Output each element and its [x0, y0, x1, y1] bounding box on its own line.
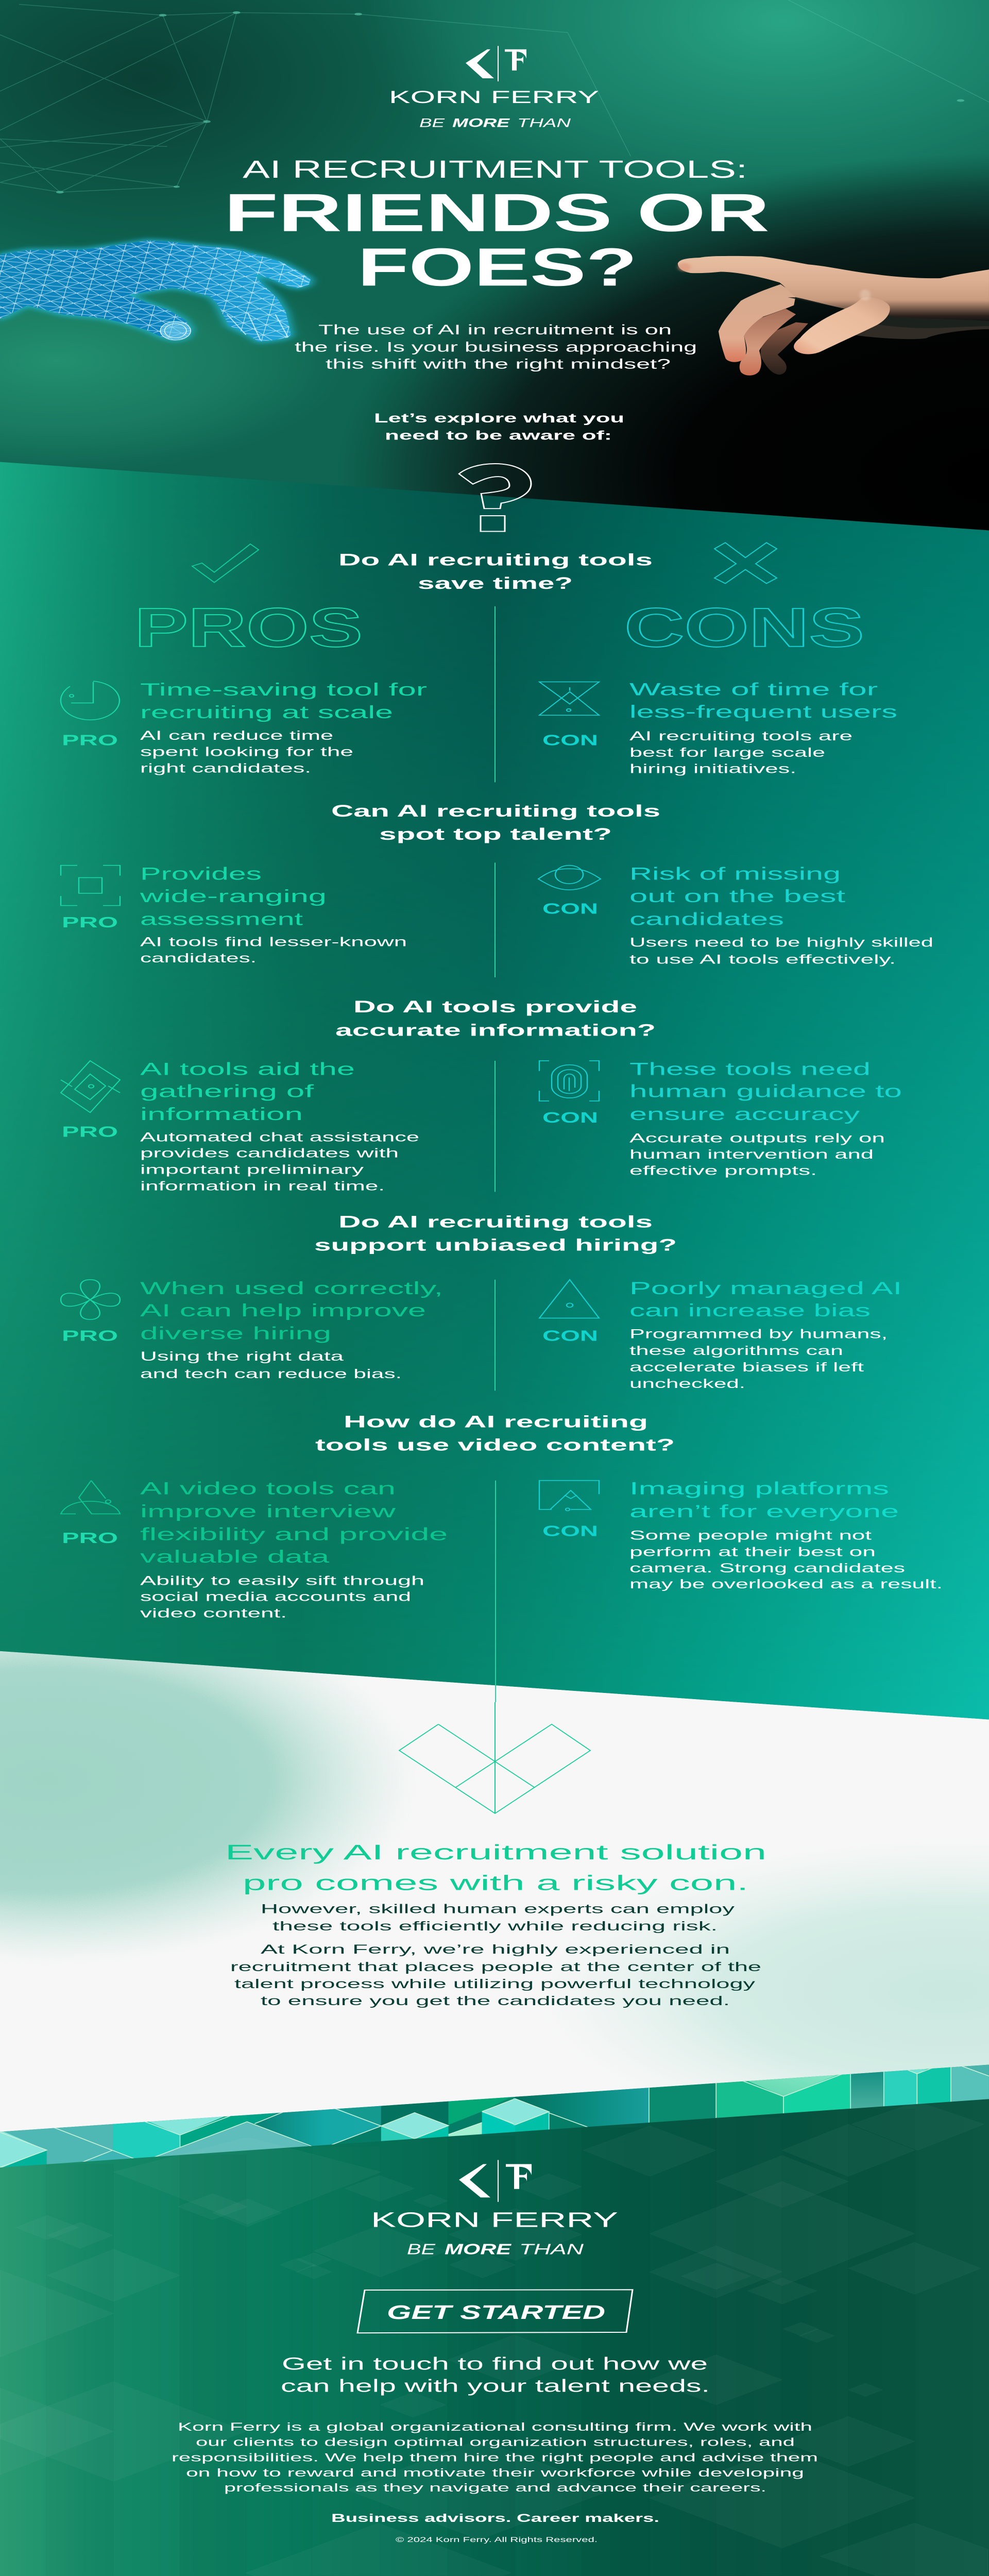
- pro text: [140, 935, 407, 965]
- heading: cons: CONS: [624, 597, 864, 658]
- closing text: recruitment that places people at the center of the: [230, 1959, 761, 1974]
- pro heading: wide-ranging: [140, 887, 327, 906]
- con text: Some people might not: [629, 1528, 872, 1543]
- label: con: CON: [542, 1522, 598, 1539]
- heading: save time: [338, 550, 653, 592]
- panel: pro assessment: [61, 864, 407, 965]
- network lines: [0, 0, 989, 193]
- con text: effective prompts.: [629, 1163, 817, 1178]
- heading: unbiased hiring: support unbiased hiring?: [314, 1235, 677, 1255]
- heading: accurate information: Do AI tools provide: [353, 997, 637, 1016]
- title: FRIENDS OR: [224, 183, 770, 243]
- closing text: However, skilled human experts can employ: [261, 1902, 735, 1916]
- icon: eye: [538, 866, 601, 890]
- heading: pros: PROS: [134, 597, 363, 658]
- icon: clock: [61, 681, 120, 720]
- con text: [629, 935, 933, 967]
- closing text: these tools efficiently while reducing risk.: [272, 1919, 718, 1934]
- icon: interlocked diamonds: [61, 1061, 120, 1112]
- icon: geometric arc: [61, 1481, 120, 1514]
- con text: [629, 1131, 885, 1178]
- pro text: provides candidates with: [140, 1146, 399, 1160]
- pro heading: flexibility and provide: [140, 1524, 448, 1544]
- closing heading: [225, 1840, 766, 1895]
- label: con: CON: [542, 900, 598, 917]
- heading: video content: tools use video content?: [315, 1435, 675, 1454]
- palm shadow: [788, 297, 989, 339]
- panel: footer background: [0, 2099, 989, 2576]
- con heading: ensure accuracy: [629, 1105, 860, 1124]
- closing text: to ensure you get the candidates you need.: [261, 1993, 730, 2008]
- company description: professionals as they navigate and advance their careers.: [224, 2482, 766, 2494]
- panel: geometric band: [0, 2060, 989, 2172]
- slogan: Business advisors. Career makers.: [331, 2512, 659, 2524]
- pro text: [140, 728, 353, 775]
- pro text: and tech can reduce bias.: [140, 1366, 402, 1381]
- con text: to use AI tools effectively.: [629, 952, 896, 967]
- panel: pro gathering information: [61, 1059, 419, 1193]
- con heading: less-frequent users: [629, 702, 897, 722]
- back of hand and index finger: [678, 256, 989, 321]
- pro text: Using the right data: [140, 1349, 344, 1364]
- pro text: information in real time.: [140, 1179, 385, 1193]
- con text: may be overlooked as a result.: [629, 1577, 943, 1591]
- icon: cross mark: [714, 543, 777, 584]
- pro heading: AI video tools can: [140, 1479, 396, 1499]
- con heading: out on the best: [629, 887, 845, 906]
- heading: spot top talent: Can AI recruiting tools: [331, 802, 660, 820]
- intro text: the rise. Is your business approaching: [295, 340, 697, 355]
- pro text: social media accounts and: [140, 1589, 411, 1604]
- tagline: BE: [419, 116, 445, 130]
- pro text: Ability to easily sift through: [140, 1573, 424, 1588]
- pro heading: information: [140, 1105, 303, 1124]
- panel: con increased bias: [539, 1279, 902, 1391]
- pro heading: assessment: [140, 909, 303, 929]
- con text: unchecked.: [629, 1376, 745, 1391]
- con text: human intervention and: [629, 1147, 874, 1162]
- icon: clover: [61, 1280, 120, 1319]
- label: con: CON: [542, 1109, 598, 1126]
- panel: teal pros and cons background: [0, 462, 989, 1720]
- label: con: CON: [542, 1327, 598, 1344]
- tagline: THAN: [517, 116, 571, 130]
- company description: Korn Ferry is a global organizational consulting firm. We work with: [178, 2420, 812, 2433]
- label: pro: PRO: [62, 1327, 118, 1344]
- tagline: [419, 116, 571, 130]
- panel: con human guidance: [539, 1059, 902, 1178]
- pro heading: AI can help improve: [140, 1301, 426, 1320]
- con text: best for large scale: [629, 745, 825, 759]
- label: pro: PRO: [62, 732, 118, 749]
- label: con: CON: [542, 732, 598, 749]
- panel: con imaging platforms: [539, 1479, 943, 1591]
- pro text: important preliminary: [140, 1162, 364, 1177]
- pro heading: [140, 680, 427, 722]
- icon: digital wireframe hand: [0, 241, 311, 342]
- con heading: These tools need: [629, 1059, 871, 1079]
- con heading: [629, 680, 897, 722]
- call to action text: can help with your talent needs.: [281, 2376, 710, 2396]
- con heading: human guidance to: [629, 1081, 902, 1101]
- thumb: [794, 297, 890, 354]
- wordmark: KORN FERRY: [389, 88, 599, 107]
- icon: hourglass: [539, 682, 599, 715]
- tagline: BE: [407, 2241, 436, 2258]
- title: AI RECRUITMENT TOOLS:: [243, 156, 747, 183]
- pro heading: improve interview: [140, 1502, 396, 1521]
- title: [224, 156, 770, 297]
- logo: [389, 46, 599, 130]
- tagline: THAN: [519, 2241, 584, 2258]
- closing heading: Every AI recruitment solution: [225, 1840, 766, 1864]
- panel: pro diverse hiring: [61, 1279, 443, 1381]
- title: FOES?: [357, 238, 637, 297]
- heading: save time: Do AI recruiting tools: [338, 550, 653, 569]
- pro heading: Time-saving tool for: [140, 680, 427, 700]
- call to action text: [281, 2354, 710, 2396]
- con text: Users need to be highly skilled: [629, 935, 933, 950]
- icon: focus brackets: [61, 866, 120, 906]
- button: get started: [357, 2290, 633, 2333]
- closing text: [230, 1902, 761, 2008]
- intro text: [295, 322, 697, 372]
- panel: white closing background: [0, 1597, 989, 2145]
- tagline: MORE: [445, 2241, 512, 2258]
- con heading: Waste of time for: [629, 680, 878, 699]
- panel: con missing candidates: [538, 864, 933, 967]
- button: get started: GET STARTED: [387, 2302, 605, 2324]
- panel: pro time-saving: [61, 680, 427, 775]
- pro heading: Provides: [140, 864, 262, 884]
- footer logo: [371, 2160, 618, 2258]
- con text: AI recruiting tools are: [629, 729, 852, 743]
- con text: hiring initiatives.: [629, 761, 796, 776]
- pro text: candidates.: [140, 951, 257, 965]
- pro heading: recruiting at scale: [140, 703, 393, 722]
- con text: Programmed by humans,: [629, 1327, 888, 1341]
- heading: accurate information: accurate information?: [335, 1021, 656, 1040]
- heading: unbiased hiring: [314, 1212, 677, 1255]
- pro text: [140, 1573, 424, 1620]
- label: pro: PRO: [62, 1123, 118, 1140]
- wordmark: KORN FERRY: [371, 2208, 618, 2232]
- pro text: AI can reduce time: [140, 728, 333, 742]
- con heading: [629, 864, 845, 929]
- pro text: AI tools find lesser-known: [140, 935, 407, 949]
- con text: camera. Strong candidates: [629, 1561, 905, 1575]
- pro heading: When used correctly,: [140, 1279, 443, 1298]
- lead-in text: Let’s explore what you: [374, 411, 624, 425]
- con heading: [629, 1279, 902, 1320]
- con heading: [629, 1479, 899, 1521]
- pro text: video content.: [140, 1606, 287, 1620]
- icon: question mark: [459, 464, 531, 531]
- middle finger: [719, 284, 796, 362]
- closing text: talent process while utilizing powerful technology: [234, 1976, 756, 1991]
- pro heading: [140, 1279, 443, 1343]
- icon: check mark: [192, 544, 259, 583]
- hero background: [0, 0, 989, 800]
- con heading: can increase bias: [629, 1301, 871, 1320]
- ring finger: [740, 309, 796, 376]
- lead-in text: need to be aware of:: [385, 428, 612, 443]
- heading: video content: [315, 1412, 675, 1454]
- call to action text: Get in touch to find out how we: [282, 2354, 708, 2374]
- con text: [629, 1528, 943, 1591]
- closing text: At Korn Ferry, we’re highly experienced in: [261, 1942, 730, 1957]
- con heading: candidates: [629, 909, 784, 929]
- pro heading: valuable data: [140, 1547, 330, 1567]
- pro text: right candidates.: [140, 761, 311, 775]
- con text: accelerate biases if left: [629, 1360, 864, 1375]
- pro heading: [140, 1479, 448, 1567]
- pro heading: [140, 1059, 355, 1124]
- heading: unbiased hiring: Do AI recruiting tools: [338, 1212, 653, 1231]
- divider lines: [495, 606, 496, 1814]
- panel: pro video tools: [61, 1479, 448, 1620]
- company description: [172, 2420, 818, 2494]
- pro text: [140, 1349, 402, 1381]
- label: pro: PRO: [62, 913, 118, 930]
- label: pro: PRO: [62, 1530, 118, 1546]
- heading: video content: How do AI recruiting: [344, 1412, 648, 1431]
- icon: KF monogram: [459, 2160, 532, 2202]
- con heading: Risk of missing: [629, 864, 841, 884]
- little finger: [760, 323, 808, 375]
- con heading: [629, 1059, 902, 1124]
- con heading: Imaging platforms: [629, 1479, 889, 1499]
- heading: accurate information: [335, 997, 656, 1040]
- pro heading: [140, 864, 327, 929]
- intro text: The use of AI in recruitment is on: [318, 322, 672, 337]
- lead-in text: [374, 411, 624, 443]
- icon: geometric heart: [399, 1724, 590, 1814]
- heading: spot top talent: spot top talent?: [379, 824, 612, 843]
- tagline: [407, 2241, 584, 2258]
- con text: [629, 1327, 888, 1391]
- pro heading: diverse hiring: [140, 1324, 331, 1343]
- heading: spot top talent: [331, 802, 660, 843]
- con text: [629, 729, 852, 776]
- pro text: Automated chat assistance: [140, 1130, 419, 1144]
- pro heading: AI tools aid the: [140, 1059, 355, 1079]
- icon: triangle: [539, 1280, 599, 1318]
- company description: on how to reward and motivate their workforce while developing: [186, 2467, 804, 2479]
- closing heading: pro comes with a risky con.: [243, 1871, 748, 1895]
- heading: save time: save time?: [418, 573, 573, 592]
- con text: these algorithms can: [629, 1343, 843, 1358]
- company description: our clients to design optimal organization structures, roles, and: [196, 2436, 795, 2448]
- pro heading: gathering of: [140, 1081, 314, 1101]
- intro text: this shift with the right mindset?: [326, 357, 671, 372]
- con heading: Poorly managed AI: [629, 1279, 902, 1298]
- con text: Accurate outputs rely on: [629, 1131, 885, 1145]
- pro text: [140, 1130, 419, 1193]
- company description: responsibilities. We help them hire the right people and advise them: [172, 2451, 818, 2464]
- icon: fingerprint: [539, 1061, 599, 1101]
- icon: human hand: [678, 256, 989, 376]
- con heading: aren’t for everyone: [629, 1502, 899, 1521]
- copyright: © 2024 Korn Ferry. All Rights Reserved.: [396, 2535, 598, 2544]
- icon: KF monogram: [466, 46, 526, 81]
- panel: con waste of time: [539, 680, 897, 776]
- icon: framed mountain: [539, 1481, 599, 1511]
- con text: perform at their best on: [629, 1545, 876, 1559]
- tagline: MORE: [452, 116, 510, 130]
- pro text: spent looking for the: [140, 744, 353, 759]
